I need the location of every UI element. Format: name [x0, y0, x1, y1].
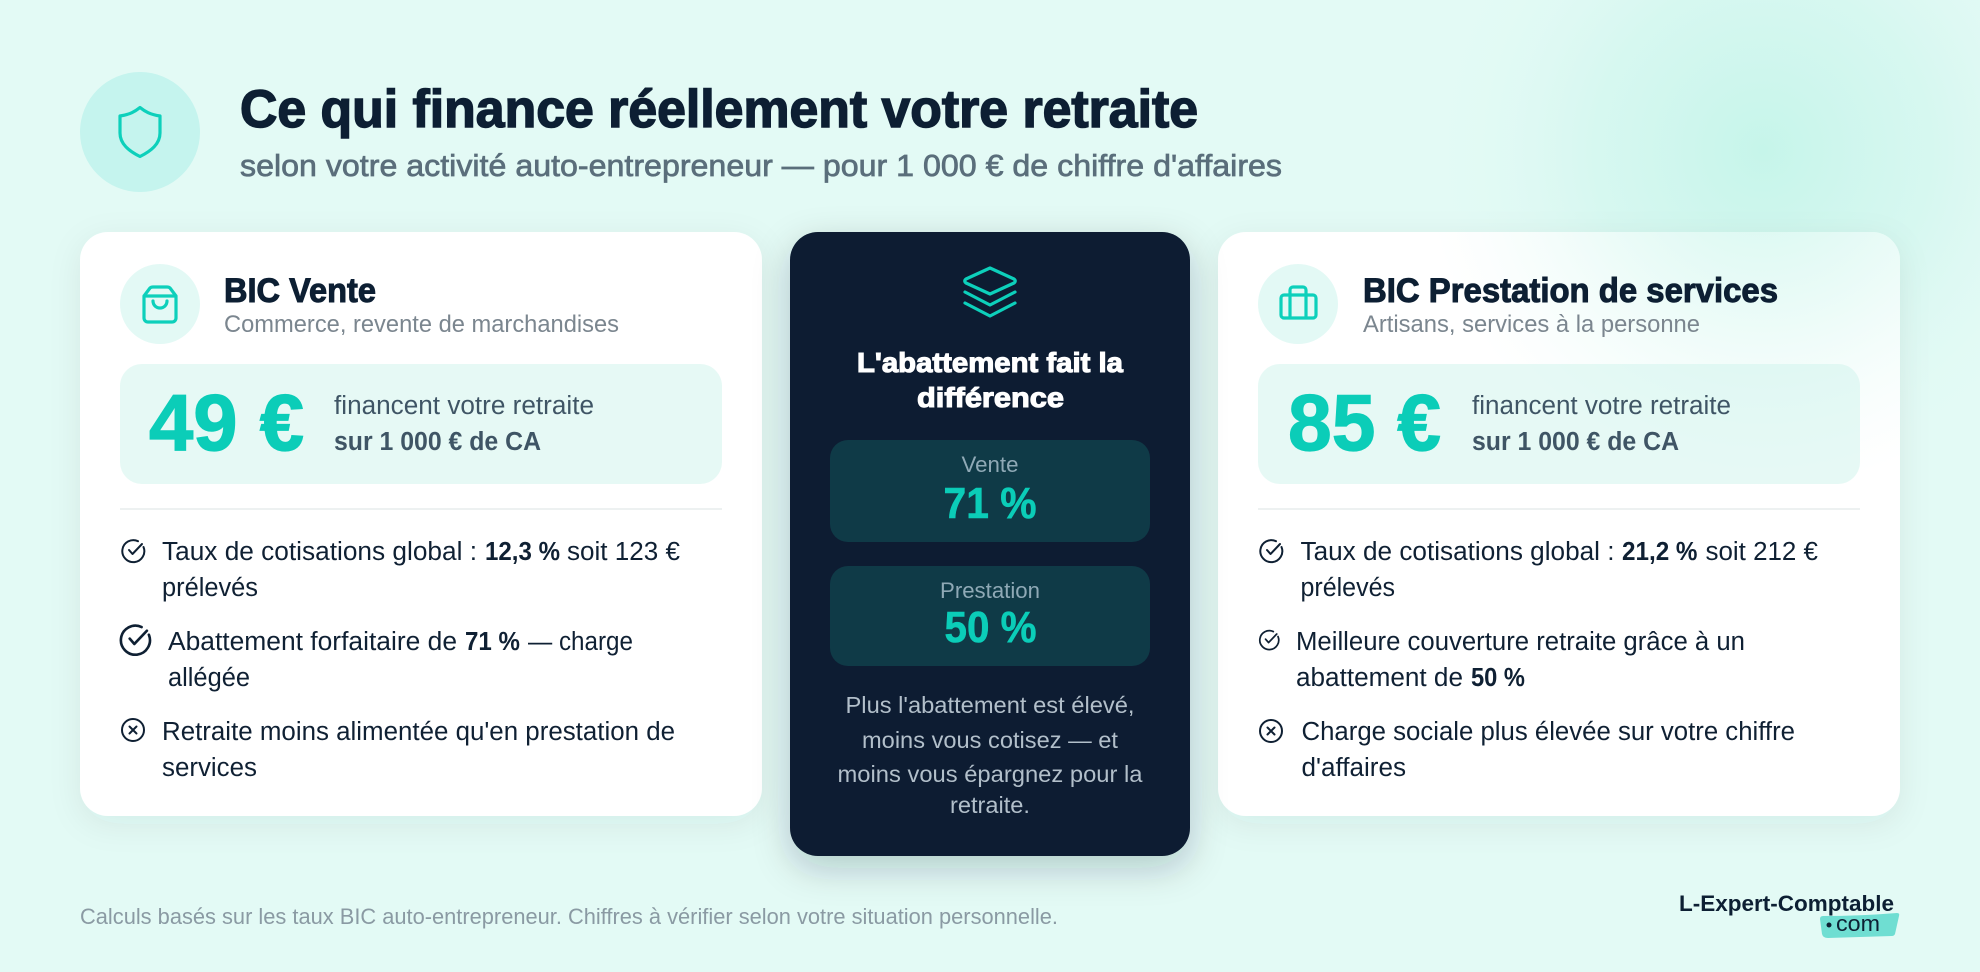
explanation text — [838, 692, 1143, 818]
icon: shopping bag — [120, 264, 200, 344]
rate box: Vente 71 %: Vente — [962, 452, 1018, 477]
bullet: taux de cotisations — [122, 538, 680, 602]
card heading: BIC Prestation de services — [1363, 272, 1778, 310]
bullet: charge sociale — [1260, 718, 1795, 782]
bullet: taux de cotisations: 21,2 % — [1622, 538, 1698, 566]
bullet: taux de cotisations: Taux de cotisations global : — [1300, 538, 1614, 566]
explanation text: moins vous cotisez — et — [862, 727, 1119, 753]
explanation text: moins vous épargnez pour la — [838, 761, 1143, 787]
title: Ce qui finance réellement votre retraite — [240, 80, 1198, 139]
bullet: meilleure couverture — [1260, 628, 1745, 692]
panel: abattement — [790, 232, 1190, 856]
bullet: taux de cotisations — [1260, 538, 1818, 602]
bullet: abattement forfaitaire: allégée — [168, 664, 250, 692]
panel: BIC Vente — [80, 232, 762, 816]
bullet: taux de cotisations: 12,3 % — [485, 538, 560, 566]
card subheading: Commerce, revente de marchandises — [224, 311, 619, 338]
explanation text: retraite. — [950, 792, 1030, 818]
bullet: taux de cotisations: prélevés — [162, 574, 258, 602]
value box: 85 €: financent votre retraite — [1472, 392, 1731, 420]
value box: 49 € — [120, 364, 722, 484]
card heading: BIC Vente — [224, 272, 376, 310]
logo: L-Expert-Comptable — [1679, 891, 1894, 916]
logo: com — [1836, 911, 1880, 936]
subtitle: selon votre activité auto-entrepreneur — pour 1 000 € de chiffre d'affaires — [240, 148, 1282, 183]
bullet: retraite moins alimentée — [122, 718, 675, 782]
rate box: Prestation 50 %: 50 % — [944, 603, 1036, 652]
panel: BIC Prestation de services — [1218, 232, 1900, 816]
rate box: Vente 71 %: 71 % — [944, 479, 1036, 528]
bullet: meilleure couverture: abattement de — [1296, 664, 1463, 692]
bullet: meilleure couverture: 50 % — [1471, 664, 1525, 692]
bullet: taux de cotisations: soit 212 € — [1706, 538, 1818, 566]
value box: 49 €: 49 € — [149, 378, 304, 467]
icon: suitcase — [1258, 264, 1338, 344]
value box: 85 €: sur 1 000 € de CA — [1472, 428, 1679, 456]
rate box: Vente 71 % — [830, 440, 1150, 542]
rate box: Prestation 50 % — [830, 566, 1150, 666]
explanation text: Plus l'abattement est élevé, — [846, 692, 1134, 718]
value box: 49 €: sur 1 000 € de CA — [334, 428, 541, 456]
icon: stacked layers — [965, 268, 1015, 316]
bullet: charge sociale: d'affaires — [1302, 754, 1406, 782]
footnote: Calculs basés sur les taux BIC auto-entrepreneur. Chiffres à vérifier selon votre situation personnelle. — [80, 904, 1058, 929]
bullet: taux de cotisations: soit 123 € — [567, 538, 680, 566]
logo — [1679, 891, 1899, 938]
rate box: Prestation 50 %: Prestation — [940, 578, 1040, 603]
bullet: retraite moins alimentée: Retraite moins alimentée qu'en prestation de — [162, 718, 675, 746]
bullet: retraite moins alimentée: services — [162, 754, 257, 782]
card subheading: Artisans, services à la personne — [1363, 311, 1700, 338]
center heading: L'abattement fait la — [857, 347, 1123, 378]
bullet: abattement forfaitaire: — charge — [528, 628, 633, 656]
header icon: shield — [80, 72, 200, 192]
bullet: abattement forfaitaire: Abattement forfaitaire de — [168, 628, 457, 656]
center heading: différence — [917, 382, 1064, 413]
bullet: meilleure couverture: Meilleure couverture retraite grâce à un — [1296, 628, 1745, 656]
bullet: charge sociale: Charge sociale plus élevée sur votre chiffre — [1302, 718, 1795, 746]
bullet: abattement forfaitaire: 71 % — [465, 628, 520, 656]
value box: 85 € — [1258, 364, 1860, 484]
value box: 85 €: 85 € — [1288, 378, 1441, 467]
center heading — [857, 347, 1123, 413]
bullet: taux de cotisations: prélevés — [1300, 574, 1395, 602]
bullet: abattement forfaitaire — [121, 626, 633, 692]
bullet: taux de cotisations: Taux de cotisations global : — [162, 538, 477, 566]
value box: 49 €: financent votre retraite — [334, 392, 594, 420]
